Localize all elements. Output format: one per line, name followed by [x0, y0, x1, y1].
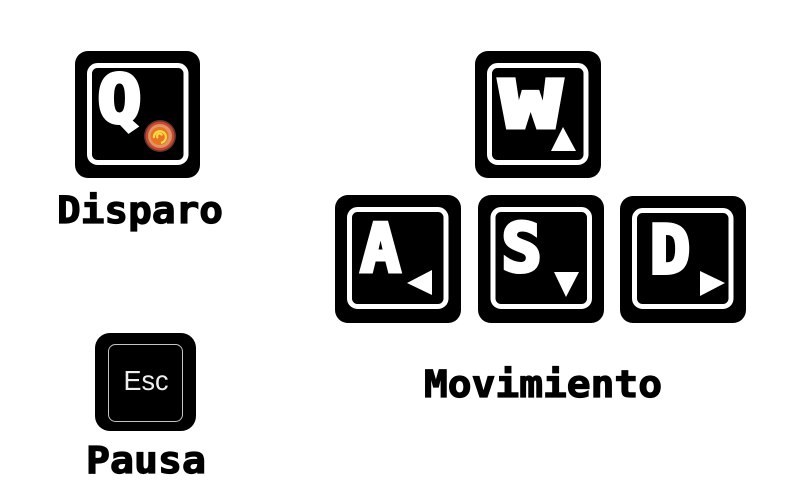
label: Disparo: Disparo — [57, 189, 223, 232]
arrow left — [407, 270, 432, 295]
key: A left — [335, 195, 461, 323]
key: S down — [478, 195, 604, 323]
letter S: S — [501, 209, 542, 287]
letter Esc: Esc — [124, 365, 168, 396]
letter D: D — [650, 211, 690, 289]
label: Pausa: Pausa — [86, 439, 206, 482]
label: Movimiento: Movimiento — [424, 363, 662, 406]
arrow down — [554, 272, 579, 297]
key: W up — [475, 51, 601, 178]
key: D right — [620, 196, 746, 323]
letter Q: Q — [98, 62, 141, 138]
letter W: W — [500, 67, 561, 144]
key: Esc pause — [95, 333, 196, 431]
icon: fire orb — [144, 120, 176, 152]
key: Q fire — [75, 51, 200, 178]
arrow up — [551, 127, 576, 151]
letter A: A — [360, 210, 401, 288]
arrow right — [700, 271, 725, 296]
